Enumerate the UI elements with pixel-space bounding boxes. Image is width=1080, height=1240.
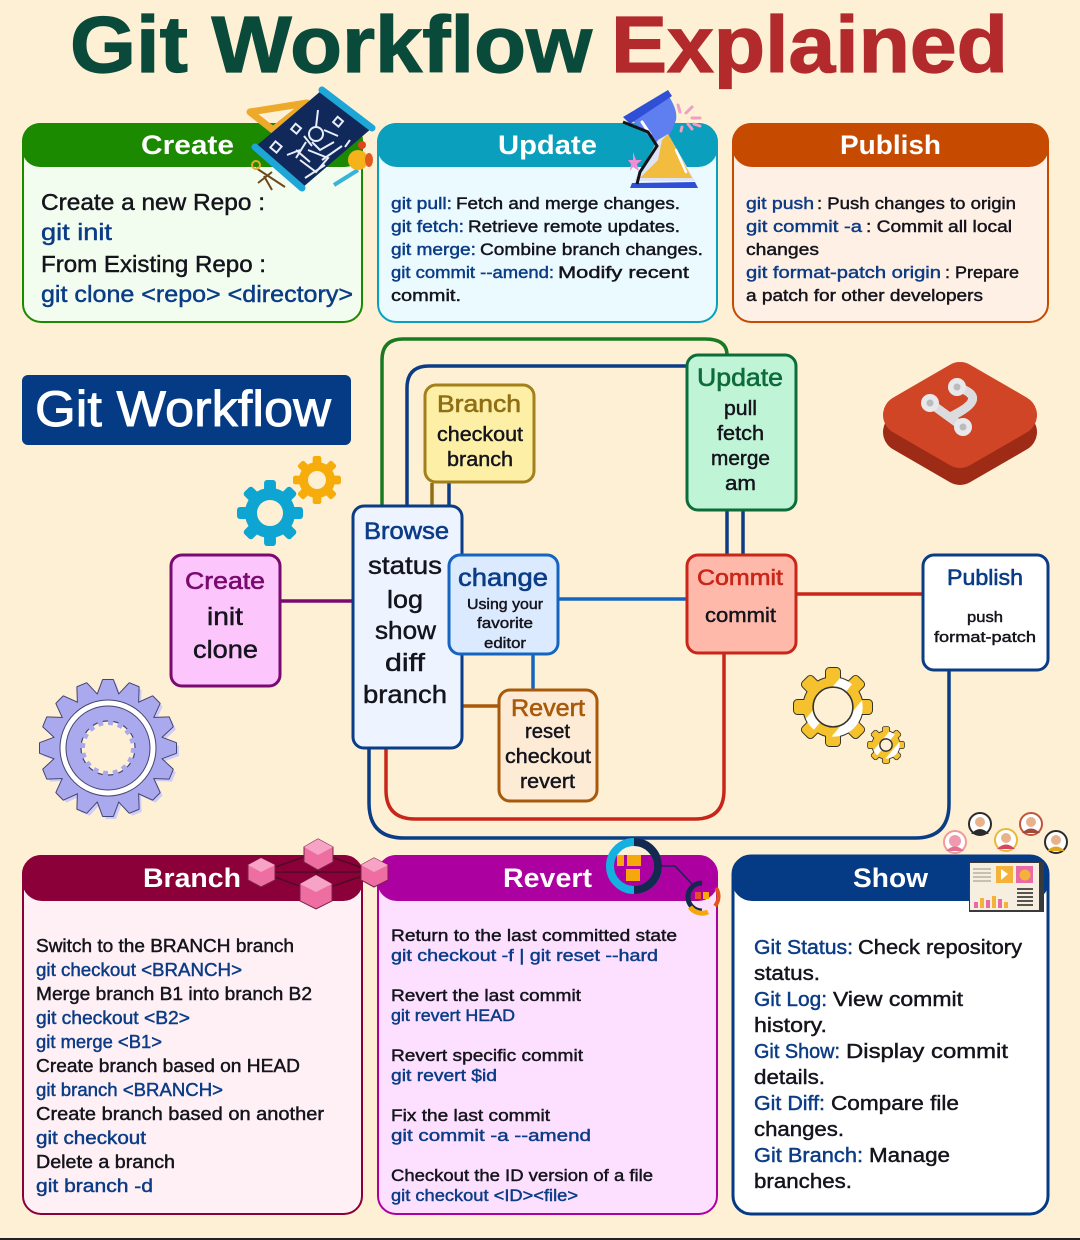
- text: update commands: Retrieve remote updates.: [468, 217, 680, 236]
- text: show commands: details.: [754, 1067, 825, 1089]
- box: update: pull: [724, 398, 757, 420]
- heading: branch: Branch: [143, 863, 241, 893]
- text: publish commands: : Commit all local: [866, 217, 1012, 236]
- box: branch: [425, 385, 534, 482]
- text: show commands: Manage: [869, 1145, 950, 1167]
- icon: git branch tile: [903, 378, 1017, 465]
- text: show commands: Display commit: [846, 1041, 1009, 1063]
- title: Git Workflow: [70, 0, 593, 89]
- box: commit: commit: [705, 605, 776, 627]
- box: update: Update: [697, 364, 783, 392]
- box: browse: [353, 506, 462, 748]
- text: show commands: history.: [754, 1015, 827, 1037]
- text: branch commands: Delete a branch: [36, 1152, 175, 1172]
- connectors: workflow arrows: [280, 339, 949, 838]
- text: show commands: branches.: [754, 1171, 852, 1193]
- heading: git workflow: [22, 375, 351, 445]
- box: revert: reset: [525, 721, 570, 743]
- box: branch: Branch: [437, 391, 521, 418]
- box: revert: Revert: [511, 695, 585, 722]
- icon: people avatars: [944, 813, 1067, 853]
- text: show commands: Git Diff:: [754, 1093, 825, 1115]
- text: update commands: Fetch and merge changes.: [456, 194, 680, 213]
- text: publish commands: [746, 194, 1019, 305]
- text: update commands: git commit --amend:: [391, 263, 554, 282]
- text: show commands: Git Status:: [754, 937, 853, 959]
- box: change: favorite: [477, 615, 533, 632]
- text: publish commands: git commit -a: [746, 217, 863, 236]
- text: show commands: changes.: [754, 1119, 844, 1141]
- text: update commands: Combine branch changes.: [480, 240, 703, 259]
- text: branch commands: [36, 936, 324, 1196]
- text: update commands: Modify recent: [558, 263, 689, 282]
- panel: show: [732, 855, 1049, 1214]
- text: create commands: git clone <repo> <directory>: [41, 281, 353, 307]
- box: update: fetch: [717, 423, 764, 445]
- panel: revert: [377, 855, 718, 1214]
- heading: update: Update: [498, 130, 597, 160]
- box: publish: [923, 555, 1048, 670]
- box: revert: revert: [520, 771, 575, 793]
- panel: branch: [22, 855, 363, 1214]
- text: create commands: Create a new Repo :: [41, 189, 265, 215]
- box: commit: Commit: [697, 565, 783, 590]
- icon: blueprint with drawing tools: [250, 90, 373, 190]
- text: publish commands: git push: [746, 194, 814, 213]
- text: update commands: git pull:: [391, 194, 452, 213]
- box: browse: Browse: [364, 518, 449, 545]
- box: browse: status: [368, 552, 442, 580]
- heading: git workflow: Git Workflow: [35, 381, 332, 437]
- box: change: editor: [484, 635, 526, 652]
- text: branch commands: git checkout: [36, 1128, 146, 1148]
- box: browse: diff: [385, 649, 425, 677]
- icon: hourglass: [623, 90, 700, 188]
- text: branch commands: Create branch based on another: [36, 1104, 324, 1124]
- box: branch: branch: [447, 449, 513, 471]
- box: create: Create: [185, 568, 265, 595]
- box: publish: format-patch: [934, 629, 1036, 646]
- text: create commands: git init: [41, 219, 113, 245]
- box: update: merge: [711, 448, 770, 470]
- text: show commands: Compare file: [831, 1093, 959, 1115]
- heading: publish: Publish: [840, 130, 941, 160]
- text: show commands: View commit: [833, 989, 963, 1011]
- title: [70, 0, 1008, 89]
- box: publish: Publish: [947, 565, 1023, 590]
- heading: create: Create: [141, 130, 234, 160]
- text: publish commands: : Push changes to origin: [817, 194, 1016, 213]
- icon: donut charts: [610, 842, 719, 913]
- box: browse: log: [387, 586, 423, 614]
- box: browse: show: [375, 617, 437, 645]
- text: revert commands: git commit -a --amend: [391, 1126, 591, 1145]
- text: branch commands: git checkout <B2>: [36, 1008, 190, 1028]
- box: commit: [687, 555, 796, 653]
- icon: yellow gears: [794, 668, 904, 763]
- box: create: init: [207, 603, 243, 631]
- text: branch commands: git branch -d: [36, 1176, 153, 1196]
- text: branch commands: git checkout <BRANCH>: [36, 960, 242, 980]
- icon: network of pink cubes: [248, 839, 388, 909]
- box: browse: branch: [363, 681, 447, 709]
- text: revert commands: Fix the last commit: [391, 1106, 550, 1125]
- text: show commands: [754, 937, 1022, 1193]
- box: revert: [499, 690, 597, 801]
- icon: purple gear: [40, 680, 179, 819]
- panel: create: [22, 123, 363, 322]
- text: show commands: status.: [754, 963, 820, 985]
- text: update commands: git merge:: [391, 240, 476, 259]
- text: update commands: git fetch:: [391, 217, 464, 236]
- box: change: change: [458, 564, 548, 592]
- box: branch: checkout: [437, 424, 523, 446]
- text: publish commands: git format-patch origin: [746, 263, 941, 282]
- panel: update: [377, 123, 718, 322]
- box: create: clone: [193, 636, 258, 664]
- icon: dashboard card: [969, 862, 1044, 912]
- box: change: [449, 555, 558, 654]
- box: revert: checkout: [505, 746, 591, 768]
- text: show commands: Check repository: [858, 937, 1022, 959]
- text: revert commands: git checkout <ID><file>: [391, 1186, 578, 1205]
- box: update: am: [725, 473, 756, 495]
- text: revert commands: Checkout the ID version of a file: [391, 1166, 653, 1185]
- text: revert commands: git revert $id: [391, 1066, 497, 1085]
- heading: revert: Revert: [503, 863, 592, 893]
- text: update commands: commit.: [391, 286, 461, 305]
- text: revert commands: Return to the last committed state: [391, 926, 677, 945]
- text: branch commands: git merge <B1>: [36, 1032, 162, 1052]
- text: branch commands: Switch to the BRANCH branch: [36, 936, 294, 956]
- text: revert commands: Revert specific commit: [391, 1046, 583, 1065]
- panel: publish: [732, 123, 1049, 322]
- text: show commands: Git Show:: [754, 1041, 840, 1063]
- text: show commands: Git Log:: [754, 989, 827, 1011]
- box: publish: push: [967, 609, 1003, 626]
- text: publish commands: changes: [746, 240, 819, 259]
- text: branch commands: git branch <BRANCH>: [36, 1080, 223, 1100]
- text: publish commands: : Prepare: [945, 263, 1019, 282]
- title: Explained: [611, 0, 1008, 89]
- text: create commands: From Existing Repo :: [41, 251, 266, 277]
- text: revert commands: git revert HEAD: [391, 1006, 515, 1025]
- text: create commands: [41, 189, 353, 307]
- icon: blue and orange gears: [237, 456, 341, 546]
- text: revert commands: [391, 926, 677, 1205]
- heading: show: Show: [853, 863, 929, 893]
- box: update: [687, 355, 796, 510]
- text: update commands: [391, 194, 703, 305]
- text: revert commands: git checkout -f | git reset --hard: [391, 946, 658, 965]
- text: publish commands: a patch for other developers: [746, 286, 983, 305]
- text: revert commands: Revert the last commit: [391, 986, 581, 1005]
- box: create: [171, 555, 280, 686]
- text: branch commands: Create branch based on HEAD: [36, 1056, 300, 1076]
- text: branch commands: Merge branch B1 into branch B2: [36, 984, 312, 1004]
- text: show commands: Git Branch:: [754, 1145, 863, 1167]
- box: change: Using your: [467, 596, 543, 613]
